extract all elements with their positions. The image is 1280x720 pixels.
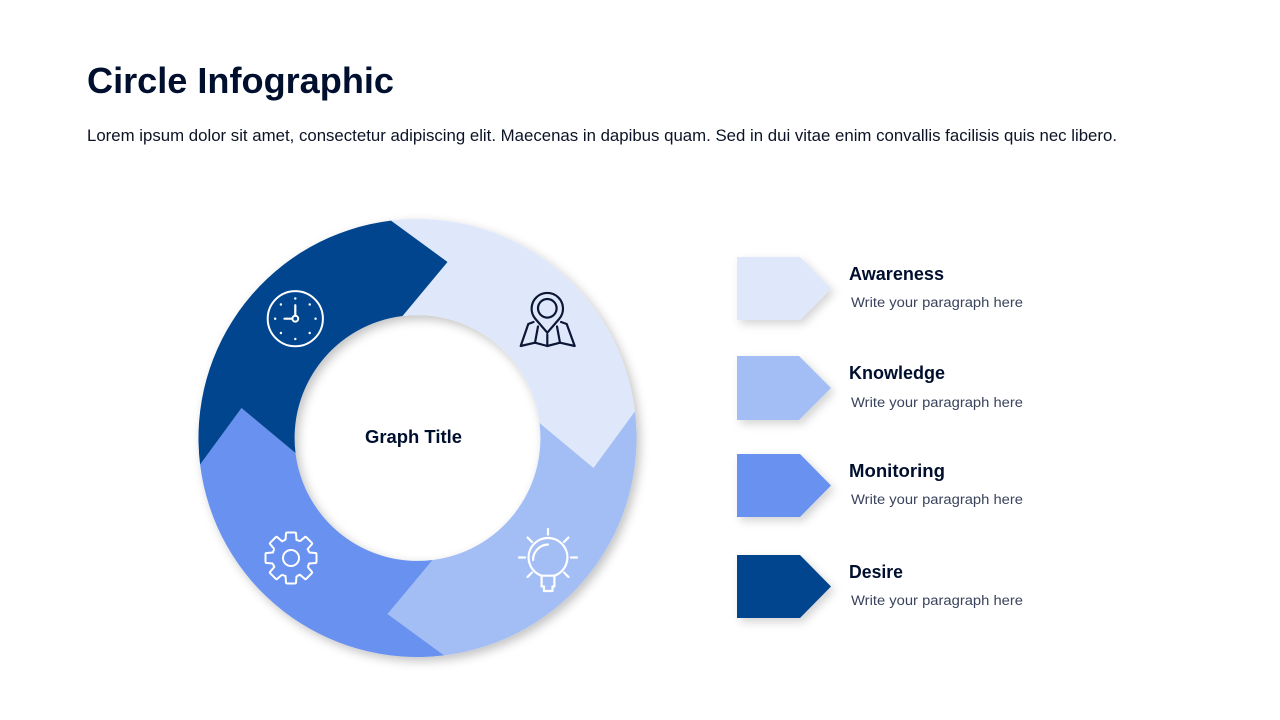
icon: map pin xyxy=(521,293,575,346)
legend arrow: desire xyxy=(737,555,831,618)
legend item: knowledge xyxy=(737,356,1023,420)
circular arrow ring chart xyxy=(198,219,637,657)
legend arrow: awareness xyxy=(737,257,831,320)
legend text: desire: Write your paragraph here xyxy=(851,593,1023,608)
legend heading: awareness: Awareness xyxy=(849,264,944,284)
legend arrow: knowledge xyxy=(737,356,831,420)
legend arrow: monitoring xyxy=(737,454,831,517)
legend item: desire xyxy=(737,555,1023,618)
icon: light bulb xyxy=(519,529,577,591)
legend text: knowledge: Write your paragraph here xyxy=(851,395,1023,410)
legend heading: knowledge: Knowledge xyxy=(849,363,945,383)
segment: desire xyxy=(198,221,448,464)
title: Circle Infographic xyxy=(87,60,394,101)
icon: clock xyxy=(268,291,323,346)
graph title: Graph Title xyxy=(365,427,462,447)
legend item: awareness xyxy=(737,257,1023,320)
legend heading: monitoring: Monitoring xyxy=(849,461,945,481)
legend heading: desire: Desire xyxy=(849,562,903,582)
segment: monitoring xyxy=(200,408,444,657)
subtitle text: Lorem ipsum dolor sit amet, consectetur adipiscing elit. Maecenas in dapibus quam. Sed in dui vitae enim convallis facilisis quis nec libero. xyxy=(87,127,1117,145)
legend text: awareness: Write your paragraph here xyxy=(851,295,1023,310)
ring segments xyxy=(198,219,637,657)
segment: knowledge xyxy=(388,412,637,655)
legend item: monitoring xyxy=(737,454,1023,517)
icon: gear xyxy=(266,532,316,584)
segment: awareness xyxy=(391,219,635,468)
legend text: monitoring: Write your paragraph here xyxy=(851,492,1023,507)
